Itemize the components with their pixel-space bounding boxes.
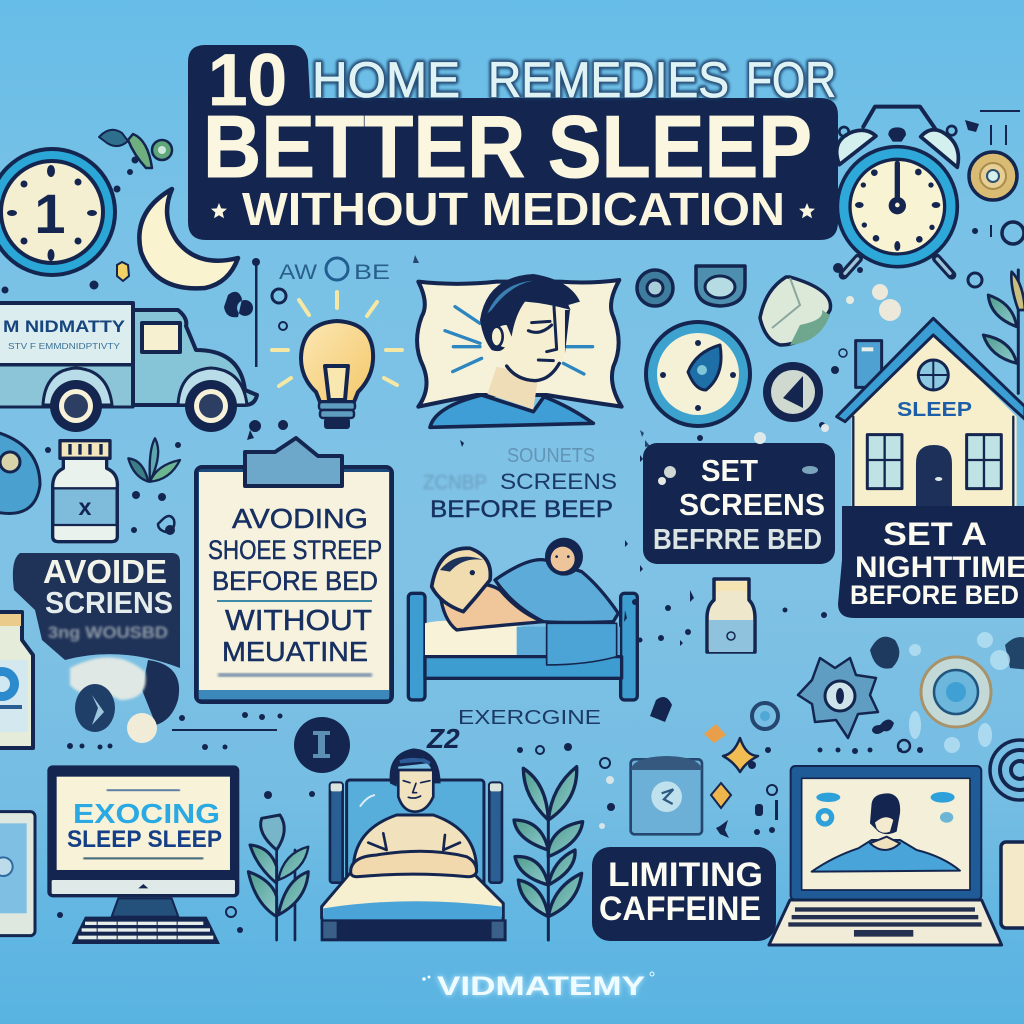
icon: medicine jar: [53, 441, 117, 542]
icon: left clock: [0, 149, 115, 275]
icon: caffeine canister: [631, 756, 702, 834]
before bed: BEFRRE BED: [653, 524, 822, 556]
text: awobe: BE: [354, 261, 390, 284]
icon: tall plant: [514, 767, 583, 940]
panel: avoide screens: [13, 553, 180, 743]
crossed arms: [351, 851, 477, 877]
headboard: [347, 780, 484, 890]
icon: left bottle: [0, 612, 33, 748]
text: z2: Z2: [426, 723, 460, 754]
icon: right spiral: [990, 740, 1024, 800]
watermark: VIDMATEMY: [437, 971, 645, 1001]
ear: [491, 327, 503, 347]
eyes nose mouth: [528, 307, 557, 361]
title stars: [211, 203, 815, 218]
clipboard text: SHOEE STREEP: [208, 535, 382, 565]
title line one: [208, 40, 836, 121]
body: [837, 147, 957, 267]
truck wheels: [43, 368, 247, 432]
bells: [837, 130, 876, 165]
icon: house: [837, 318, 1024, 507]
roof: [837, 318, 1024, 422]
icon: stars: [704, 724, 758, 838]
blurred line: 3ng WOUSBD: [48, 623, 168, 642]
round window: [918, 360, 948, 390]
title line one: FOR: [746, 52, 836, 108]
icon: tall bottle: [707, 579, 755, 652]
icon: center wall clock: [646, 322, 750, 426]
clip: [245, 438, 342, 486]
icon: crescent moon: [139, 189, 238, 288]
title line one: 10: [208, 40, 287, 121]
ticks: [855, 169, 940, 251]
icon: side plant sprig: [128, 438, 180, 482]
icon: center plant: [248, 815, 308, 940]
icon: man sleeping on pillow: [417, 274, 622, 427]
clipboard text: AVODING: [232, 503, 368, 534]
panel: limiting caffeine: [592, 847, 776, 941]
icon: gold coin: [969, 152, 1017, 200]
laptop person: [812, 793, 960, 872]
clipboard rules: [217, 600, 372, 677]
mattress: [425, 621, 523, 657]
truck cab: [133, 310, 257, 405]
faint fragment: ZCNBP: [423, 472, 487, 494]
lid: [791, 766, 981, 900]
icon: ring pair: [637, 266, 745, 306]
watermark: VIDMATEMY: [437, 971, 645, 1001]
watermark: [422, 971, 654, 1001]
screens: SCREENS: [500, 469, 617, 494]
sleeper head: [432, 548, 490, 612]
walls: [852, 333, 1017, 507]
clipboard text: MEUATINE: [222, 636, 368, 667]
icon: delivery truck: [0, 303, 257, 432]
icon: leaf: [760, 277, 830, 345]
torso: [353, 815, 477, 870]
blanket: [322, 873, 503, 918]
icon: laptop: [769, 766, 1002, 945]
title line one: HOME: [312, 52, 460, 108]
icon: small flower top left: [99, 130, 172, 168]
truck cargo panel: [0, 303, 133, 365]
hand: [889, 163, 905, 203]
clipboard text: BEFORE BED: [212, 566, 378, 596]
title line one: HOME: [312, 52, 460, 108]
sleeper body: [440, 584, 543, 630]
text: awobe: [279, 258, 390, 284]
icon: dark circle badge: [294, 717, 350, 773]
before beep: BEFORE BEEP: [430, 496, 613, 523]
icon: ripple coin: [909, 632, 1010, 753]
text: awobe: AW: [279, 261, 317, 284]
panel backing: [13, 553, 180, 668]
truck label: M NIDMATTY: [3, 317, 126, 336]
icon: left phone: [0, 812, 35, 936]
handle: [863, 107, 935, 128]
blanket: [495, 560, 618, 622]
icon: alarm clock: [837, 107, 958, 275]
title panel: [188, 40, 838, 240]
text: monitor screen: EXOCING: [73, 798, 220, 829]
bed posts: [330, 783, 343, 883]
head: [398, 770, 433, 812]
set: SET: [701, 453, 758, 488]
truck small print: STV F EMMDNIDPTIVTY: [8, 342, 121, 351]
windows: [867, 435, 902, 489]
neck: [487, 367, 538, 409]
small emblem: [658, 466, 818, 485]
text: screens before beep: [423, 445, 617, 523]
panel: set screens: [643, 443, 835, 564]
face: [497, 303, 567, 381]
clipboard text: WITHOUT: [225, 605, 372, 637]
avoide: AVOIDE: [43, 553, 167, 590]
text: monitor screen: SLEEP SLEEP: [67, 826, 222, 853]
icon: laptop right phone: [1001, 842, 1024, 928]
legs: [843, 258, 952, 275]
clipboard board: [196, 467, 392, 702]
icon: dark blob: [870, 637, 1024, 670]
icon: gear: [798, 658, 878, 738]
panel: avoiding clipboard: [196, 438, 392, 702]
text: house sleep: SLEEP: [897, 399, 972, 421]
icon: medicine jar: x: [78, 494, 91, 520]
pillow: [417, 280, 622, 407]
title line three: WITHOUT MEDICATION: [242, 183, 785, 235]
clipboard text: [208, 503, 382, 667]
hair: [480, 274, 580, 351]
shirt: [430, 395, 593, 427]
icon: desktop monitor: [47, 765, 239, 944]
icon: couple sleeping in bed: [408, 538, 637, 700]
screen icons: [816, 792, 955, 827]
icon: left clock: 1: [34, 182, 66, 245]
icon: dark circle: [763, 362, 823, 422]
second sleeper head: [545, 538, 583, 576]
icon: left swirl: [0, 432, 40, 513]
face features: [403, 781, 430, 798]
nighttime: NIGHTTIME: [855, 551, 1024, 584]
title line one: REMEDIES: [488, 52, 729, 108]
title line two: BETTER SLEEP: [203, 97, 812, 196]
limiting: LIMITING: [608, 856, 763, 894]
text: exercgine: EXERCGINE: [458, 706, 601, 729]
icon: light bulb: [272, 292, 402, 429]
panel: set a nighttime: [838, 506, 1024, 618]
screens: SCREENS: [679, 487, 825, 522]
bed posts: [408, 593, 425, 700]
faint line: SOUNETS: [507, 445, 595, 467]
pillow rays: [445, 307, 593, 374]
before bed: BEFORE BED: [850, 580, 1019, 610]
set a: SET A: [883, 516, 987, 552]
title line one: REMEDIES: [488, 52, 729, 108]
title backing shape: [188, 45, 838, 240]
text: monitor screen: [67, 798, 222, 853]
icon: man in bed: [321, 748, 507, 941]
title line one: FOR: [746, 52, 836, 108]
caffeine: CAFFEINE: [599, 890, 761, 928]
blurred face: [70, 657, 179, 743]
icon: plant right of house: [983, 270, 1024, 393]
screens: SCRIENS: [45, 585, 173, 620]
base: [769, 900, 1002, 945]
chimney: [856, 341, 882, 387]
door: [916, 445, 952, 507]
